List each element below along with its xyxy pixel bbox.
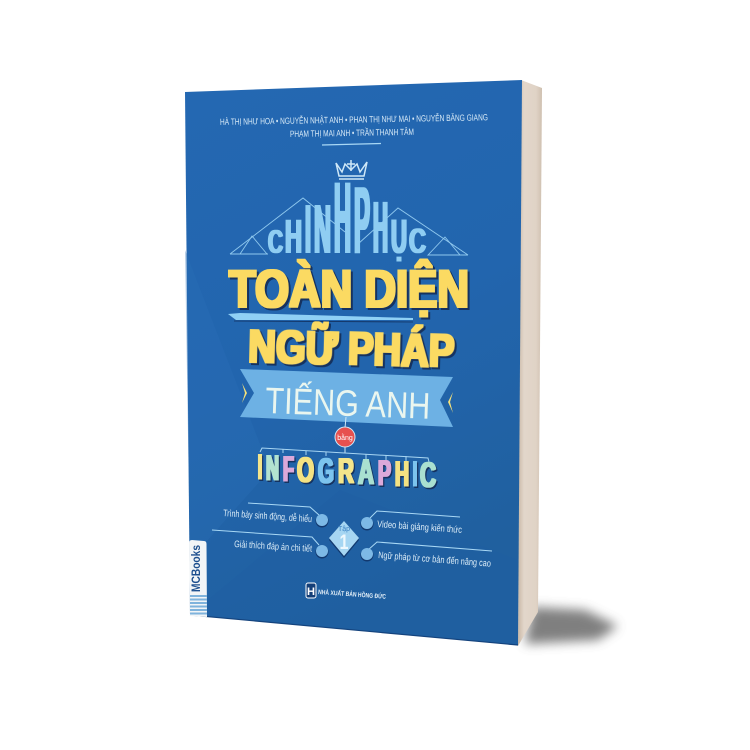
publisher logo and name: NHÀ XUẤT BẢN HỒNG ĐỨC [318,586,387,601]
heading: CHINH PHỤC: H [285,211,302,264]
publisher logo and name: H [307,586,315,598]
heading: INFOGRAPHIC: R [338,452,354,491]
heading: INFOGRAPHIC: I [413,455,417,494]
heading: INFOGRAPHIC [258,448,437,496]
icon: crown [336,160,367,179]
heading: CHINH PHỤC: P [354,167,370,274]
feature list text: Giải thích đáp án chi tiết [234,539,313,555]
volume diamond badge: 1 [340,531,349,554]
heading: CHINH PHỤC [268,161,426,275]
heading: INFOGRAPHIC: A [358,453,374,492]
heading: INFOGRAPHIC: G [318,452,334,491]
heading: TOÀN DIỆN: TOÀN DIỆN [231,260,471,321]
heading: INFOGRAPHIC: I [258,448,262,487]
heading: INFOGRAPHIC: I [259,449,263,488]
volume diamond badge [329,521,359,558]
heading: CHINH PHỤC: H [373,186,388,269]
heading: INFOGRAPHIC: P [378,454,391,493]
banner: TIẾNG ANH [240,369,453,427]
callout lines [212,503,492,551]
connector tree [260,448,429,462]
book cover [185,80,522,645]
badge: bằng [335,417,355,453]
badge: bằng: bằng [337,433,353,442]
heading: INFOGRAPHIC: I [414,456,418,495]
MCBooks spine badge: MCBooks [189,545,203,592]
heading: NGỮ PHÁP: NGỮ PHÁP [248,320,455,377]
heading: INFOGRAPHIC: H [396,456,410,495]
feature list text: Video bài giảng kiến thức [377,519,463,536]
heading: CHINH PHỤC: I [305,190,311,268]
volume diamond badge: Tập [338,526,350,533]
MCBooks spine badge [189,540,207,617]
heading: INFOGRAPHIC: F [284,451,295,490]
heading: INFOGRAPHIC: C [420,456,436,495]
heading: INFOGRAPHIC: A [359,454,375,493]
authors text: HÀ THỊ NHƯ HOA • NGUYỄN NHẬT ANH • PHAN THỊ NHƯ MAI • NGUYỄN BĂNG GIANG [220,111,488,127]
heading: INFOGRAPHIC: O [298,452,315,491]
bullet circles [316,514,374,562]
heading: TOÀN DIỆN: TOÀN DIỆN [229,258,469,319]
heading: CHINH PHỤC: C [268,223,283,260]
heading: INFOGRAPHIC: N [267,450,280,489]
roof lines [230,198,468,255]
decorative bar under heading [228,313,413,322]
heading: INFOGRAPHIC: R [339,453,355,492]
heading: INFOGRAPHIC: G [319,453,335,492]
banner: TIẾNG ANH: TIẾNG ANH [265,380,431,427]
feature list text [223,508,491,570]
page edges [518,80,542,646]
feature list text: Trình bày sinh động, dễ hiểu [223,508,312,525]
heading: INFOGRAPHIC: N [266,449,279,488]
heading: CHINH PHỤC: H [334,161,351,275]
heading: NGỮ PHÁP: NGỮ PHÁP [250,322,457,379]
authors text: PHẠM THỊ MAI ANH • TRẦN THANH TÂM [290,127,414,139]
heading: CHINH PHỤC: C [409,222,426,261]
heading: INFOGRAPHIC: O [297,451,314,490]
publisher logo and name [306,583,387,601]
drop shadow [525,607,618,644]
heading: INFOGRAPHIC: C [421,457,437,496]
feature list text: Ngữ pháp từ cơ bản đến nâng cao [378,550,491,570]
heading: INFOGRAPHIC: F [283,450,294,489]
heading: CHINH PHỤC: Ụ [391,211,407,264]
heading: INFOGRAPHIC: H [395,455,409,494]
authors text [220,111,488,145]
heading: CHINH PHỤC: N [314,190,331,268]
heading: INFOGRAPHIC: P [379,455,392,494]
